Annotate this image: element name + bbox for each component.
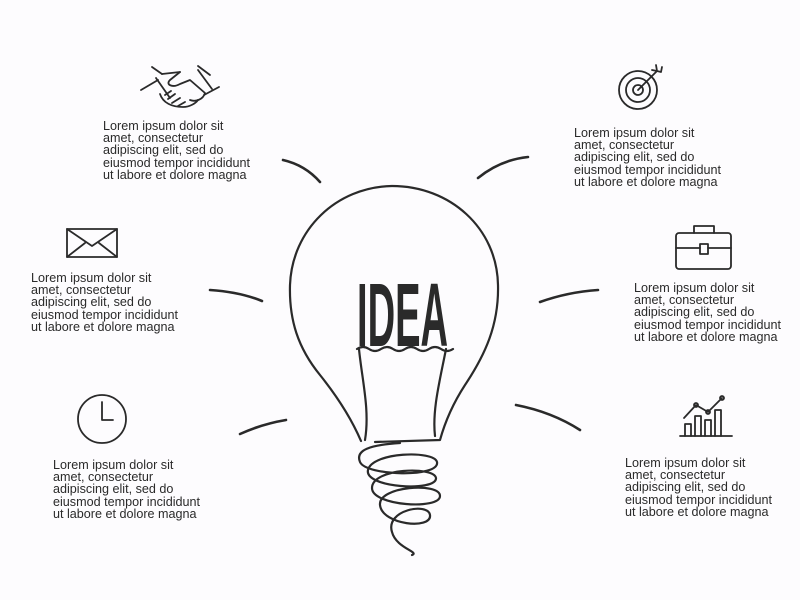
text: middle-left: Lorem ipsum dolor sit — [31, 271, 151, 285]
text: IDEA — [357, 266, 448, 366]
icon: chart — [680, 396, 732, 436]
text: bottom-left: adipiscing elit, sed do — [53, 482, 173, 496]
text: bottom-right: Lorem ipsum dolor sit — [625, 456, 745, 470]
icon: target — [619, 65, 662, 109]
text: top-right: eiusmod tempor incididunt — [574, 163, 721, 177]
text: bottom-right: ut labore et dolore magna — [625, 505, 769, 519]
text: bottom-left: Lorem ipsum dolor sit — [53, 458, 173, 472]
text: middle-right — [634, 281, 781, 344]
lightbulb — [290, 186, 498, 555]
text: middle-right: ut labore et dolore magna — [634, 330, 778, 344]
text: middle-left: ut labore et dolore magna — [31, 320, 175, 334]
text: bottom-left: ut labore et dolore magna — [53, 507, 197, 521]
text: top-left: adipiscing elit, sed do — [103, 143, 223, 157]
text: bottom-right: eiusmod tempor incididunt — [625, 493, 772, 507]
icon: envelope — [67, 229, 117, 257]
text: bottom-right: amet, consectetur — [625, 468, 725, 482]
text: top-left — [103, 119, 250, 182]
text: top-left: eiusmod tempor incididunt — [103, 156, 250, 170]
text: middle-right: adipiscing elit, sed do — [634, 305, 754, 319]
text: middle-right: amet, consectetur — [634, 293, 734, 307]
text: bottom-left: eiusmod tempor incididunt — [53, 495, 200, 509]
icon: clock — [78, 395, 126, 443]
text: middle-left: amet, consectetur — [31, 283, 131, 297]
icon: briefcase — [676, 226, 731, 269]
text: middle-left — [31, 271, 178, 334]
text: top-right: ut labore et dolore magna — [574, 175, 718, 189]
text: top-left: ut labore et dolore magna — [103, 168, 247, 182]
text: middle-left: eiusmod tempor incididunt — [31, 308, 178, 322]
text: top-right: adipiscing elit, sed do — [574, 150, 694, 164]
text: middle-left: adipiscing elit, sed do — [31, 295, 151, 309]
text: bottom-right — [625, 456, 772, 519]
text: top-right — [574, 126, 721, 189]
text: middle-right: Lorem ipsum dolor sit — [634, 281, 754, 295]
text: top-left: Lorem ipsum dolor sit — [103, 119, 223, 133]
rays — [210, 157, 598, 434]
text: top-right: amet, consectetur — [574, 138, 674, 152]
text: top-left: amet, consectetur — [103, 131, 203, 145]
text: bottom-right: adipiscing elit, sed do — [625, 480, 745, 494]
text: middle-right: eiusmod tempor incididunt — [634, 318, 781, 332]
icon: handshake — [141, 66, 219, 107]
text: top-right: Lorem ipsum dolor sit — [574, 126, 694, 140]
text: bottom-left — [53, 458, 200, 521]
text: bottom-left: amet, consectetur — [53, 470, 153, 484]
